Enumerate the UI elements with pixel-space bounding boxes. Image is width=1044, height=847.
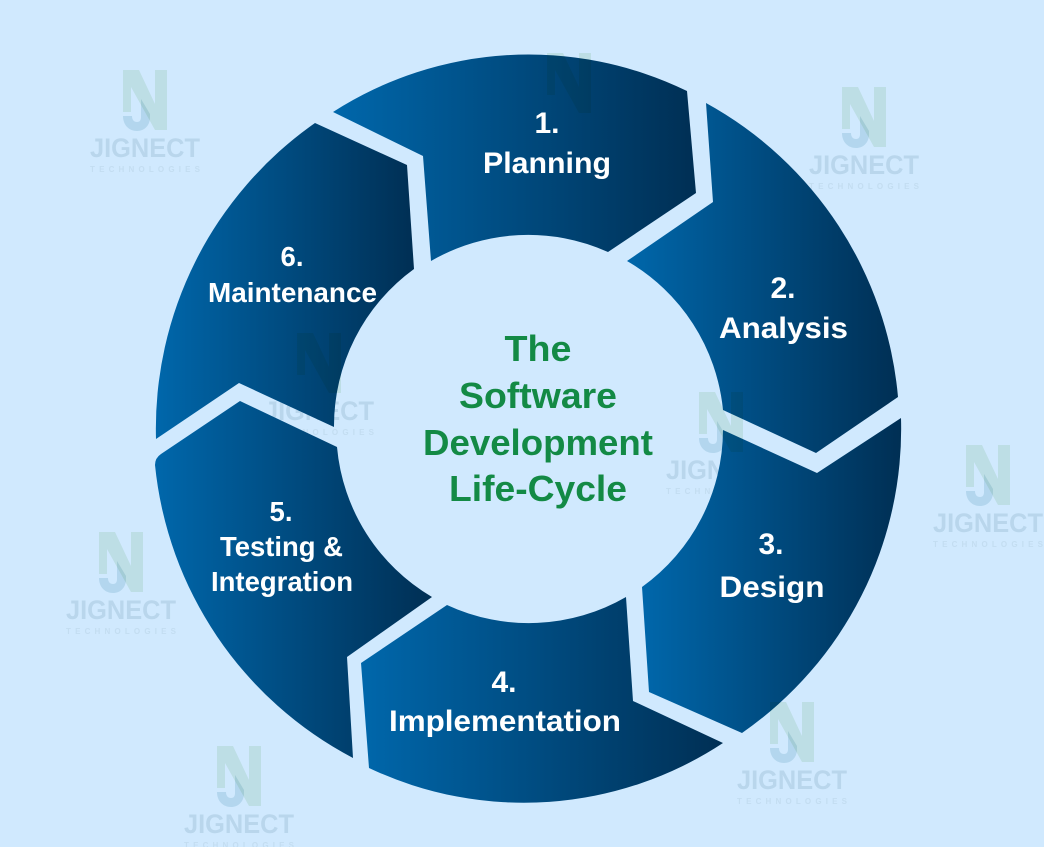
watermark 7: TECHNOLOGIES	[66, 627, 177, 636]
label: Design: Design	[720, 571, 824, 604]
watermark 6	[933, 474, 1044, 549]
watermark 4: TECHNOLOGIES	[264, 428, 375, 437]
segment 1: Planning	[333, 55, 696, 261]
watermark 4: JIGNECT	[264, 396, 374, 426]
label: Planning: 1.	[534, 107, 560, 140]
segment 2: Analysis	[627, 103, 898, 453]
label: Planning	[483, 107, 611, 180]
label: Maintenance: 6.	[281, 241, 303, 272]
segment 6: Maintenance	[156, 123, 414, 439]
center title: Life-Cycle	[449, 468, 627, 509]
segment 4: Implementation	[361, 597, 723, 803]
label: Analysis: Analysis	[719, 312, 848, 345]
watermark 1	[90, 99, 201, 174]
label: Testing and Integration: Integration	[211, 566, 353, 597]
label: Analysis	[719, 272, 848, 345]
label: Design: 3.	[758, 528, 784, 561]
process wheel	[155, 55, 901, 803]
watermark 4	[264, 362, 375, 437]
watermark 1: TECHNOLOGIES	[90, 165, 201, 174]
watermark N marks	[99, 53, 1010, 806]
watermark 8	[737, 731, 848, 806]
label: Testing and Integration: Testing &	[220, 531, 343, 562]
watermark 6: TECHNOLOGIES	[933, 540, 1044, 549]
center title: The	[504, 328, 572, 369]
watermark 5: JIGNECT	[666, 455, 776, 485]
label: Testing and Integration: 5.	[270, 496, 292, 527]
watermark 5: TECHNOLOGIES	[666, 487, 777, 496]
label: Testing and Integration	[211, 496, 353, 597]
watermark 9: JIGNECT	[184, 809, 294, 839]
watermark 3	[514, 82, 625, 157]
watermark 2: JIGNECT	[809, 150, 919, 180]
watermark 7: JIGNECT	[66, 595, 176, 625]
label: Implementation	[389, 666, 621, 738]
watermark 8: TECHNOLOGIES	[737, 797, 848, 806]
segment 5: Testing and Integration	[155, 401, 432, 758]
watermark 2: TECHNOLOGIES	[809, 182, 920, 191]
center title: Software	[459, 375, 617, 416]
label: Design	[720, 528, 824, 604]
watermark 9	[184, 775, 295, 847]
label: Maintenance: Maintenance	[208, 277, 377, 308]
label: Maintenance	[208, 241, 377, 308]
label: Implementation: Implementation	[389, 705, 621, 738]
watermark 7	[66, 561, 177, 636]
label: Implementation: 4.	[491, 666, 517, 699]
label: Planning: Planning	[483, 147, 611, 180]
center title	[423, 328, 653, 509]
watermark 3: TECHNOLOGIES	[514, 148, 625, 157]
watermark 8: JIGNECT	[737, 765, 847, 795]
watermark 5	[666, 421, 777, 496]
watermark 1: JIGNECT	[90, 133, 200, 163]
watermark 3: JIGNECT	[514, 116, 624, 146]
center title: Development	[423, 422, 653, 463]
segment 3: Design	[642, 418, 901, 733]
label: Analysis: 2.	[770, 272, 796, 305]
watermark 2	[809, 116, 920, 191]
